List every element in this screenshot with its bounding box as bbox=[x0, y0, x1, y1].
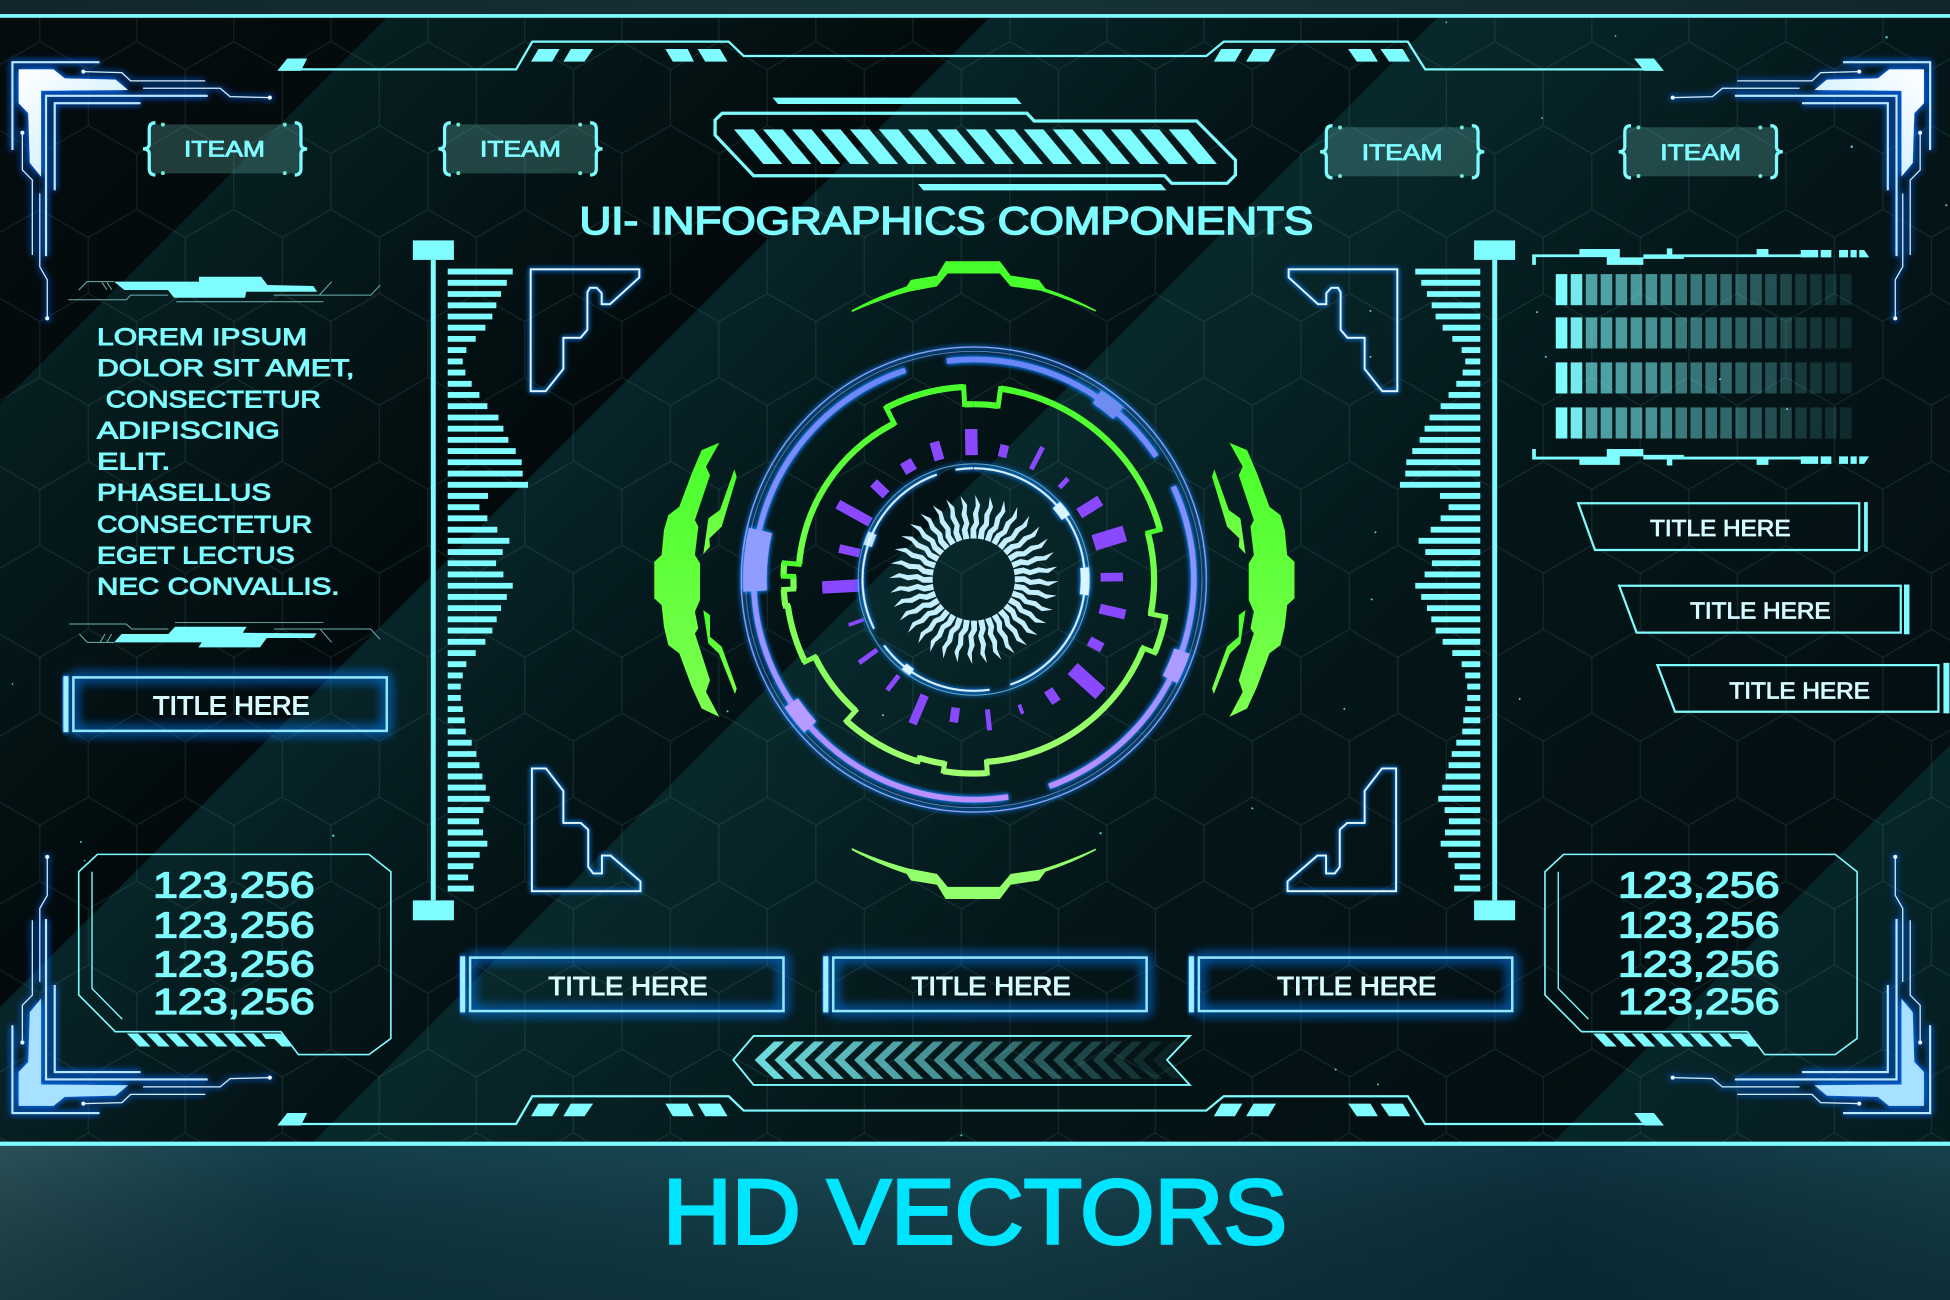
corner ornament bottom right bbox=[1671, 855, 1930, 1113]
title box left bbox=[63, 676, 387, 732]
item badge 3: ITEAM bbox=[1362, 140, 1443, 165]
number panel right bbox=[1545, 854, 1857, 1055]
footer band bbox=[0, 1142, 1950, 1300]
corner ornament top left bbox=[12, 62, 272, 320]
title box right 3: TITLE HERE bbox=[1729, 677, 1870, 703]
lorem ipsum text block: CONSECTETUR bbox=[106, 386, 321, 413]
item badge 1: ITEAM bbox=[184, 137, 265, 162]
right bar chart and brackets bbox=[1288, 240, 1515, 920]
chevron progress bar bbox=[733, 1036, 1190, 1085]
bottom frame bbox=[277, 1096, 1664, 1125]
green side brackets right bbox=[1212, 443, 1294, 717]
green side brackets left bbox=[654, 443, 737, 717]
title box right 1: TITLE HERE bbox=[1650, 515, 1791, 541]
item badge 2: ITEAM bbox=[480, 137, 561, 162]
title box right 2 bbox=[1619, 585, 1909, 634]
title box right 1 bbox=[1578, 502, 1868, 552]
item badge 1 bbox=[143, 123, 307, 175]
ornament below lorem text bbox=[69, 622, 380, 647]
ornament above lorem text bbox=[68, 277, 380, 302]
lorem ipsum text block: ADIPISCING bbox=[97, 417, 280, 444]
purple radial ticks bbox=[822, 429, 1125, 730]
lorem ipsum text block: NEC CONVALLIS. bbox=[97, 573, 340, 600]
lorem ipsum text block: LOREM IPSUM bbox=[97, 324, 307, 351]
title box bottom 2: TITLE HERE bbox=[912, 971, 1071, 1001]
title box bottom 2 bbox=[823, 956, 1147, 1012]
wavy spoke sun bbox=[889, 495, 1058, 664]
item badge 4: ITEAM bbox=[1660, 140, 1741, 165]
number panel left: 123,256 bbox=[153, 904, 315, 945]
green stepped ring bbox=[779, 384, 1169, 775]
number panel left bbox=[79, 854, 391, 1055]
corner ornament bottom left bbox=[12, 855, 272, 1113]
number panel left: 123,256 bbox=[153, 944, 315, 985]
item badge 3 bbox=[1320, 125, 1484, 178]
histogram panel bbox=[1532, 248, 1869, 465]
lorem ipsum text block: ELIT. bbox=[97, 448, 170, 475]
outer blue ring bbox=[741, 347, 1206, 812]
inner white ring bbox=[858, 464, 1089, 695]
striped title bar bbox=[715, 98, 1235, 190]
number panel right: 123,256 bbox=[1618, 904, 1780, 945]
lorem ipsum text block bbox=[97, 324, 354, 600]
title box bottom 1 bbox=[460, 956, 783, 1012]
central radial hud bbox=[654, 261, 1294, 899]
lorem ipsum text block: DOLOR SIT AMET, bbox=[97, 355, 354, 382]
number panel right: 123,256 bbox=[1618, 981, 1780, 1022]
main heading: UI- INFOGRAPHICS COMPONENTS bbox=[580, 200, 1313, 243]
item badge 4 bbox=[1619, 125, 1783, 178]
title box bottom 1: TITLE HERE bbox=[548, 971, 708, 1001]
title box right 3 bbox=[1657, 663, 1949, 713]
number panel left: 123,256 bbox=[153, 864, 315, 905]
green arc top bbox=[852, 261, 1096, 312]
top frame bbox=[277, 42, 1664, 71]
footer heading: HD VECTORS bbox=[663, 1161, 1287, 1264]
number panel right: 123,256 bbox=[1618, 864, 1780, 905]
lorem ipsum text block: CONSECTETUR bbox=[97, 511, 312, 538]
title box bottom 3: TITLE HERE bbox=[1277, 971, 1436, 1001]
title box right 2: TITLE HERE bbox=[1690, 597, 1831, 623]
lorem ipsum text block: EGET LECTUS bbox=[97, 542, 295, 569]
title box bottom 3 bbox=[1189, 956, 1512, 1012]
corner ornament top right bbox=[1671, 62, 1930, 320]
item badge 2 bbox=[438, 123, 603, 175]
number panel left: 123,256 bbox=[153, 981, 315, 1022]
number panel right: 123,256 bbox=[1618, 944, 1780, 985]
green arc bottom bbox=[852, 848, 1096, 899]
title box left: TITLE HERE bbox=[153, 690, 310, 720]
left bar chart and brackets bbox=[413, 240, 640, 920]
lorem ipsum text block: PHASELLUS bbox=[97, 480, 271, 507]
